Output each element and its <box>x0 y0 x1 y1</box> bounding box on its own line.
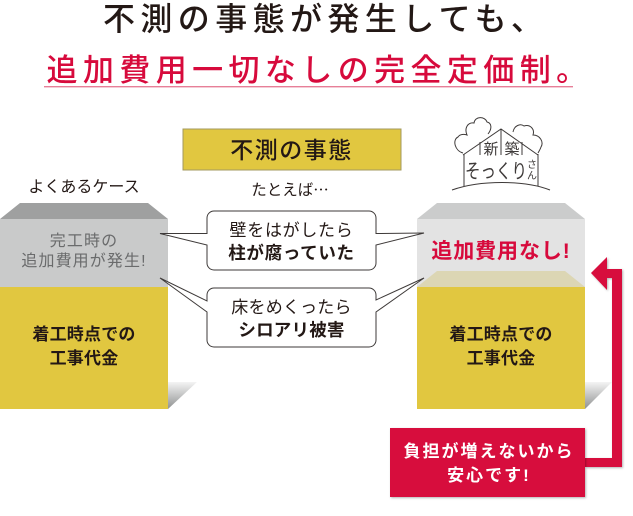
callout: wall bubble <box>160 211 424 270</box>
block shadow <box>168 382 197 409</box>
panel: common case block <box>0 203 197 409</box>
heading: 不測の事態 <box>183 129 401 170</box>
panel: shinchiku block: 工事代金 <box>467 348 535 368</box>
panel: shinchiku block <box>417 203 612 409</box>
block top <box>417 203 585 219</box>
callout: floor bubble: シロアリ被害 <box>238 320 345 340</box>
logo text: 新 <box>483 141 499 158</box>
panel: shinchiku block: 着工時点での <box>449 324 553 344</box>
no additional cost section <box>417 219 585 287</box>
icon: shinchiku sottokurisan logo: さ <box>527 159 537 171</box>
icon: shinchiku sottokurisan logo: そっくり <box>465 161 527 183</box>
callout: floor bubble: 床をめくったら <box>231 298 352 317</box>
base construction cost section <box>417 287 585 409</box>
title underline <box>44 86 573 87</box>
callout: wall bubble: 壁をはがしたら <box>230 221 353 240</box>
callout: wall bubble: 柱が腐っていた <box>228 243 355 263</box>
window bars <box>480 129 522 155</box>
base construction cost section <box>0 287 168 409</box>
panel: common case block: 着工時点での <box>32 324 136 344</box>
house outline <box>463 129 538 186</box>
additional cost section <box>0 219 168 287</box>
callout: reassurance box: 安心です! <box>447 466 531 485</box>
callout: reassurance box <box>390 428 585 497</box>
panel: common case block: 完工時の <box>50 232 118 250</box>
icon: shinchiku sottokurisan logo: ん <box>527 170 537 182</box>
left tree <box>455 118 491 153</box>
title <box>44 1 592 88</box>
callout: reassurance box: 負担が増えないから <box>404 441 574 461</box>
title line 1: 不測の事態が発生しても、 <box>103 1 548 37</box>
panel: shinchiku block: 追加費用なし! <box>431 240 571 263</box>
arrow: reassurance to no extra cost <box>585 257 622 467</box>
panel: common case block: 工事代金 <box>50 348 118 368</box>
right tree <box>513 125 542 153</box>
inner block top <box>417 271 585 287</box>
label: よくあるケース: よくあるケース <box>28 178 140 196</box>
icon: shinchiku sottokurisan logo: 築 <box>504 140 520 158</box>
callout: floor bubble <box>160 278 424 347</box>
icon: shinchiku sottokurisan logo <box>452 118 550 190</box>
title line 2: 追加費用一切なしの完全定価制。 <box>46 53 592 88</box>
block shadow <box>585 382 612 409</box>
label: たとえば: たとえば… <box>251 178 329 200</box>
block top <box>0 203 168 219</box>
heading: 不測の事態: 不測の事態 <box>230 137 353 163</box>
ground <box>452 182 550 190</box>
panel: common case block: 追加費用が発生! <box>21 252 147 270</box>
